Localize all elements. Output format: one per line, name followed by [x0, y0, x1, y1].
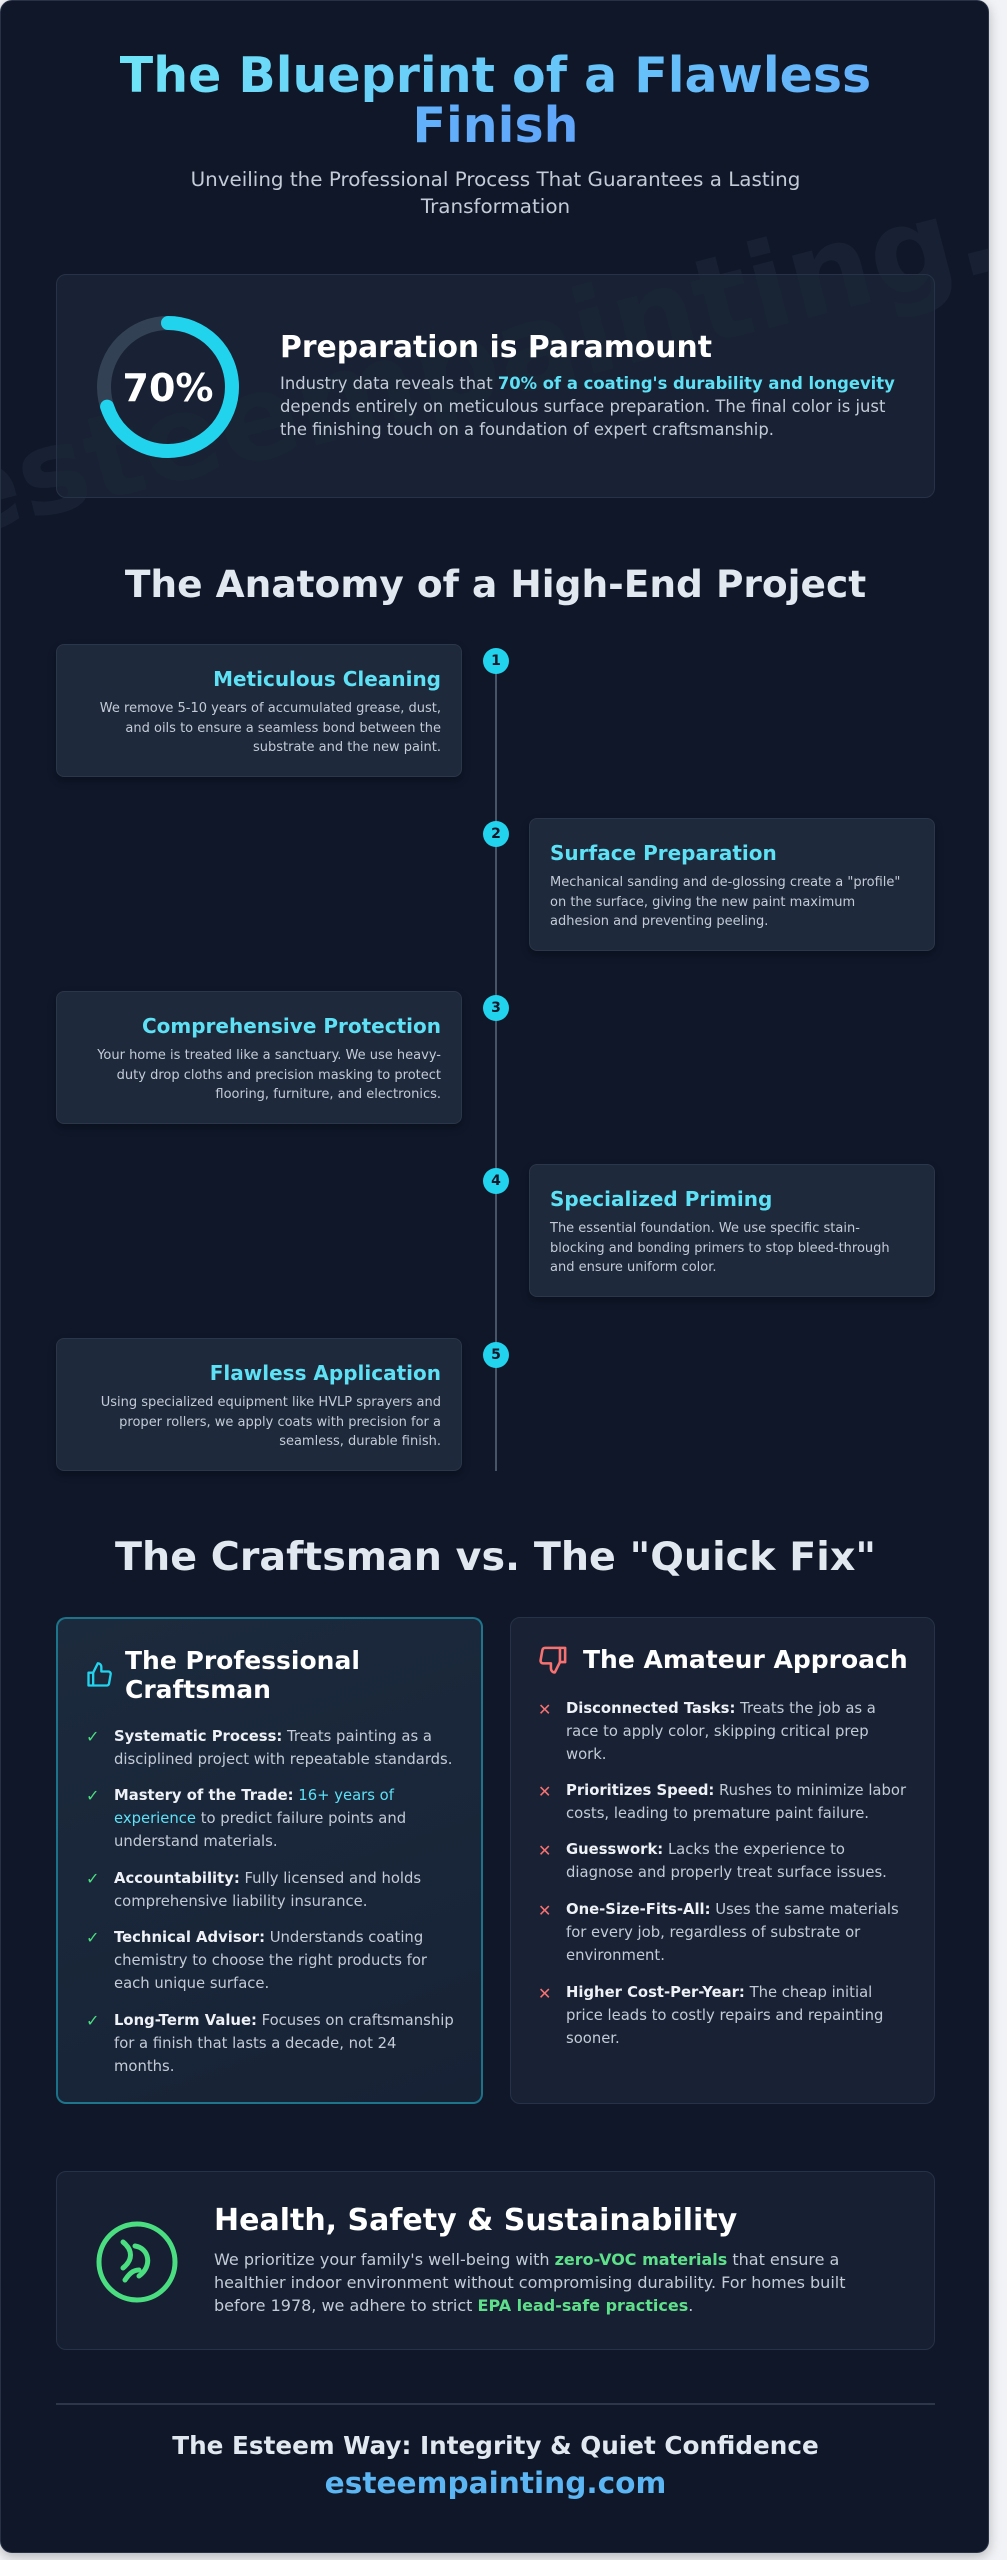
- heading: Craftsman: [125, 1675, 271, 1704]
- icon: thumbs down: [539, 1646, 566, 1674]
- step 3: Your home is treated like a sanctuary. We use heavy-: [97, 1048, 441, 1063]
- heading: Health, Safety & Sustainability: [214, 2203, 737, 2238]
- heading: The Amateur Approach: [583, 1645, 908, 1674]
- step 5: seamless, durable finish.: [279, 1434, 441, 1449]
- donut chart 70%: [97, 316, 239, 458]
- step 1: We remove 5-10 years of accumulated grease, dust,: [100, 701, 441, 716]
- panel: amateur approach: price leads to costly repairs and repainting: [566, 2007, 883, 2024]
- body text: before 1978, we adhere to strict EPA lead-safe practices.: [214, 2296, 693, 2315]
- body text: [280, 374, 895, 439]
- step 4: blocking and bonding primers to stop bleed-through: [550, 1241, 890, 1256]
- heading: Preparation is Paramount: [280, 330, 712, 365]
- panel: professional craftsman: Long-Term Value: Focuses on craftsmanship: [114, 2012, 454, 2029]
- donut chart 70%: 70%: [123, 366, 213, 410]
- body text: [214, 2250, 846, 2315]
- title: [120, 47, 871, 154]
- body text: the finishing touch on a foundation of expert craftsmanship.: [280, 420, 774, 439]
- step 2: Surface Preparation: [550, 841, 777, 865]
- step 2: Mechanical sanding and de-glossing create a "profile": [550, 875, 900, 890]
- panel: amateur approach: sooner.: [566, 2030, 620, 2047]
- marker 5: 5: [491, 1347, 501, 1363]
- body text: We prioritize your family's well-being with zero-VOC materials that ensure a: [214, 2250, 839, 2269]
- panel: amateur approach: Disconnected Tasks: Treats the job as a: [566, 1700, 876, 1717]
- panel: amateur approach: ✕: [538, 1984, 551, 2003]
- body text: depends entirely on meticulous surface preparation. The final color is just: [280, 397, 885, 416]
- body text: Industry data reveals that 70% of a coating's durability and longevity: [280, 374, 895, 393]
- panel: professional craftsman: Accountability: Fully licensed and holds: [114, 1870, 421, 1887]
- step 5: proper rollers, we apply coats with precision for a: [119, 1415, 441, 1430]
- panel: professional craftsman: for a finish that lasts a decade, not 24: [114, 2035, 396, 2052]
- icon: thumbs up: [87, 1662, 112, 1687]
- panel: preparation stat: [56, 274, 935, 498]
- footer tagline: The Esteem Way: Integrity & Quiet Confidence: [172, 2431, 819, 2460]
- step 1: [56, 644, 462, 777]
- marker 1: [483, 648, 509, 674]
- list: ✓: [86, 1727, 99, 1746]
- panel: professional craftsman: [56, 1617, 483, 2104]
- heading: The Professional: [125, 1646, 360, 1675]
- panel: amateur approach: ✕: [538, 1901, 551, 1920]
- step 4: The essential foundation. We use specific stain-: [550, 1221, 860, 1236]
- panel: professional craftsman: Systematic Process: Treats painting as a: [114, 1728, 432, 1745]
- step 1: and oils to ensure a seamless bond between the: [125, 721, 441, 736]
- step 1: substrate and the new paint.: [253, 740, 441, 755]
- step 2: adhesion and preventing peeling.: [550, 914, 768, 929]
- panel: amateur approach: work.: [566, 1746, 607, 1763]
- subtitle: Unveiling the Professional Process That Guarantees a Lasting: [191, 168, 800, 191]
- panel: professional craftsman: understand materials.: [114, 1833, 278, 1850]
- panel: amateur approach: for every job, regardless of substrate or: [566, 1924, 860, 1941]
- step 3: flooring, furniture, and electronics.: [215, 1087, 441, 1102]
- panel: professional craftsman: comprehensive liability insurance.: [114, 1893, 367, 1910]
- marker 2: [483, 821, 509, 847]
- panel: professional craftsman: ✓: [86, 2011, 99, 2030]
- step 4: [529, 1164, 935, 1297]
- panel: professional craftsman: Mastery of the Trade: 16+ years of: [114, 1787, 394, 1804]
- marker 4: [483, 1168, 509, 1194]
- marker 1: 1: [491, 653, 501, 669]
- title: Finish: [412, 97, 578, 154]
- panel: professional craftsman: chemistry to choose the right products for: [114, 1952, 427, 1969]
- panel: amateur approach: Higher Cost-Per-Year: The cheap initial: [566, 1984, 872, 2001]
- step 2: [529, 818, 935, 951]
- step 2: on the surface, giving the new paint maximum: [550, 895, 855, 910]
- panel: professional craftsman: experience to predict failure points and: [114, 1810, 406, 1827]
- panel: amateur approach: diagnose and properly treat surface issues.: [566, 1864, 887, 1881]
- footer url: esteempainting.com: [325, 2466, 666, 2500]
- marker 3: [483, 995, 509, 1021]
- step 5: Flawless Application: [210, 1361, 441, 1385]
- body text: healthier indoor environment without compromising durability. For homes built: [214, 2273, 845, 2292]
- heading: [125, 1646, 360, 1704]
- step 1: Meticulous Cleaning: [213, 667, 441, 691]
- panel: amateur approach: costs, leading to premature paint failure.: [566, 1805, 869, 1822]
- subtitle: Transformation: [421, 195, 570, 218]
- step 3: [56, 991, 462, 1124]
- panel: professional craftsman: ✓: [86, 1869, 99, 1888]
- panel: professional craftsman: ✓: [86, 1786, 99, 1805]
- panel: amateur approach: ✕: [538, 1782, 551, 1801]
- panel: amateur approach: environment.: [566, 1947, 665, 1964]
- marker 5: [483, 1342, 509, 1368]
- panel: professional craftsman: months.: [114, 2058, 174, 2075]
- panel: amateur approach: Guesswork: Lacks the experience to: [566, 1841, 845, 1858]
- marker 3: 3: [491, 1000, 501, 1016]
- panel: amateur approach: [510, 1617, 935, 2104]
- step 4: and ensure uniform color.: [550, 1260, 717, 1275]
- panel: amateur approach: ✕: [538, 1841, 551, 1860]
- panel: amateur approach: race to apply color, skipping critical prep: [566, 1723, 869, 1740]
- list: ✕: [538, 1700, 551, 1719]
- panel: professional craftsman: Technical Advisor: Understands coating: [114, 1929, 423, 1946]
- panel: amateur approach: Prioritizes Speed: Rushes to minimize labor: [566, 1782, 906, 1799]
- panel: professional craftsman: disciplined project with repeatable standards.: [114, 1751, 452, 1768]
- step 3: duty drop cloths and precision masking to protect: [117, 1068, 441, 1083]
- marker 4: 4: [491, 1173, 501, 1189]
- step 5: [56, 1338, 462, 1471]
- heading: comparison: The Craftsman vs. The "Quick Fix": [115, 1534, 876, 1580]
- marker 2: 2: [491, 826, 501, 842]
- panel: health & safety: [56, 2171, 935, 2350]
- step 4: Specialized Priming: [550, 1187, 772, 1211]
- timeline: [495, 674, 497, 1471]
- heading: anatomy: The Anatomy of a High-End Project: [125, 562, 866, 606]
- icon: eco circle: [96, 2222, 178, 2302]
- step 3: Comprehensive Protection: [142, 1014, 441, 1038]
- panel: professional craftsman: ✓: [86, 1928, 99, 1947]
- panel: amateur approach: One-Size-Fits-All: Uses the same materials: [566, 1901, 899, 1918]
- panel: professional craftsman: each unique surface.: [114, 1975, 269, 1992]
- subtitle: [191, 168, 800, 218]
- step 5: Using specialized equipment like HVLP sprayers and: [101, 1395, 441, 1410]
- title: The Blueprint of a Flawless: [120, 47, 871, 104]
